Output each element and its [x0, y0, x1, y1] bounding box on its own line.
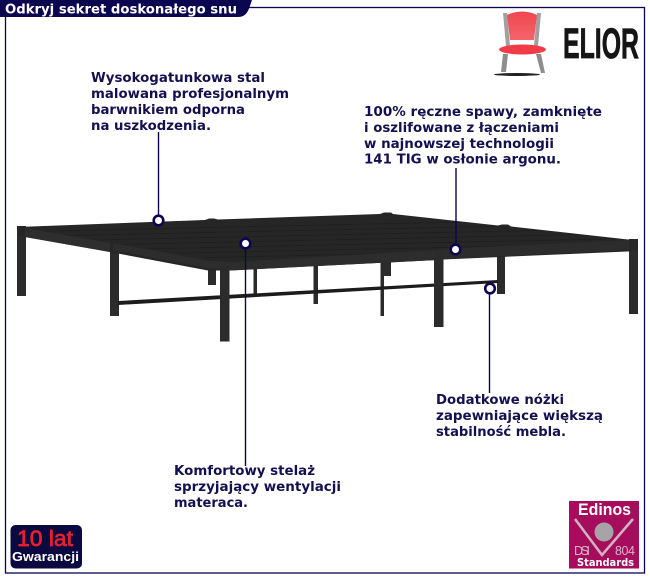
- front legs: [220, 250, 444, 342]
- callout: slatted base: [174, 239, 341, 511]
- bed frame: [0, 212, 650, 342]
- badge: Edinos standards: Standards: [577, 556, 634, 569]
- callout: extra legs: zapewniające większą: [436, 409, 603, 424]
- sleeping platform: [18, 212, 638, 270]
- callout: slatted base: Komfortowy stelaż: [174, 464, 315, 479]
- callout: slatted base: sprzyjający wentylacji: [174, 480, 341, 495]
- callout: steel: malowana profesjonalnym: [91, 87, 289, 102]
- badge: Edinos standards: DSI: [574, 544, 590, 558]
- callout: steel: na uszkodzenia.: [91, 119, 211, 134]
- callout: extra legs: Dodatkowe nóżki: [436, 393, 564, 408]
- stretcher bar: [118, 280, 498, 305]
- callout: steel: Wysokogatunkowa stal: [91, 71, 265, 86]
- callout: welds: i oszlifowane z łączeniami: [364, 121, 559, 136]
- callout: slatted base: materaca.: [174, 496, 248, 511]
- callout: welds: 141 TIG w osłonie argonu.: [364, 152, 561, 168]
- logo: Elior chair: [494, 12, 546, 76]
- side rails: [25, 228, 110, 252]
- slats: [0, 218, 650, 272]
- callout: steel: [91, 71, 289, 225]
- callout: extra legs: stabilność mebla.: [436, 425, 566, 440]
- badge: 10 year warranty: 10 lat: [17, 526, 73, 551]
- callout: welds: 100% ręczne spawy, zamknięte: [364, 105, 602, 120]
- callout: steel: barwnikiem odporna: [91, 103, 245, 118]
- legs: [17, 226, 638, 316]
- badge: Edinos standards: Edinos: [578, 500, 631, 519]
- badge: Edinos standards: 804: [615, 544, 635, 558]
- badge: 10 year warranty: Gwarancji: [12, 549, 79, 564]
- callout: extra legs: [436, 284, 603, 440]
- title tab: Odkryj sekret doskonałego snu: [5, 2, 237, 18]
- badge: Edinos standards: [569, 500, 639, 569]
- callout: welds: w najnowszej technologii: [364, 137, 554, 152]
- badge: 10 year warranty: [10, 525, 82, 568]
- callout: welds: [364, 105, 602, 254]
